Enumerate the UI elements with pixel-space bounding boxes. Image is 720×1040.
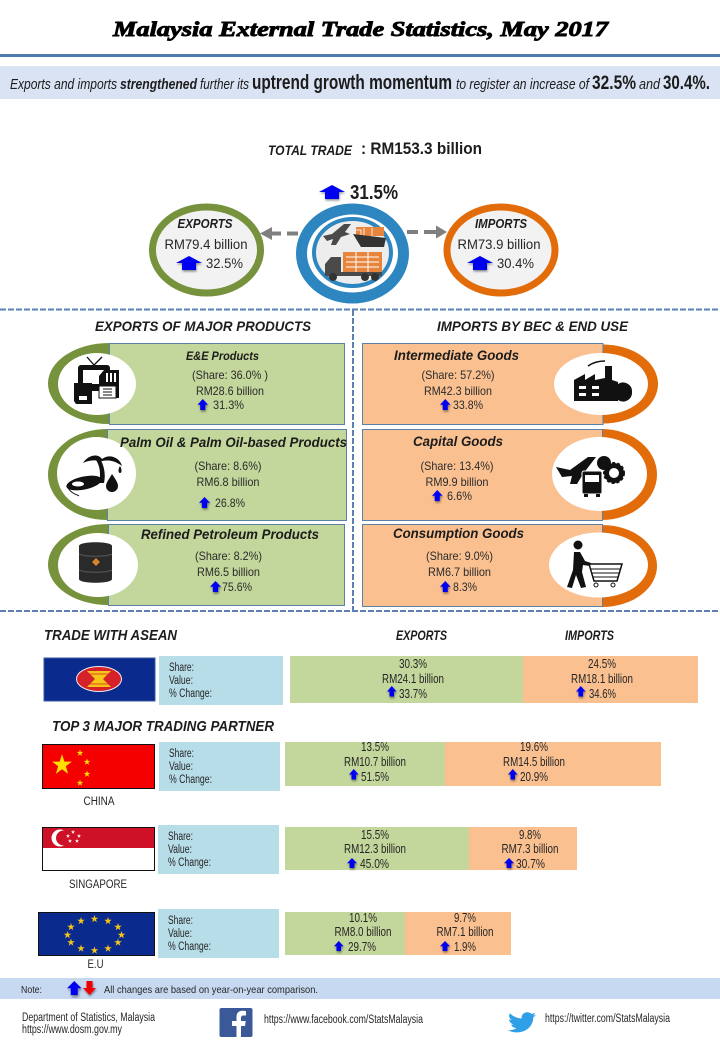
card: palm oil — [48, 429, 347, 520]
icon: plane, bus and gear — [556, 456, 624, 497]
label: EU: E.U — [88, 959, 104, 971]
flag: ASEAN — [44, 658, 155, 701]
exports circle: 32.5% — [206, 255, 243, 271]
row labels: Share: — [169, 662, 194, 674]
icon: palm and oil — [65, 456, 122, 496]
dashed section dividers — [0, 310, 720, 611]
headline band: to register an increase of — [456, 76, 590, 93]
exports circle: EXPORTS — [178, 216, 233, 231]
card: consumption goods — [362, 524, 657, 607]
imports bar: RM7.3 billion — [502, 842, 559, 856]
exports bar: 29.7% — [348, 940, 376, 954]
row labels: % Change: — [168, 941, 211, 953]
row labels — [158, 825, 279, 874]
twitter link: https://twitter.com/StatsMalaysia — [545, 1013, 670, 1025]
exports bar — [285, 740, 445, 786]
row labels — [158, 909, 279, 958]
imports bar — [405, 911, 511, 955]
card: intermediate goods: RM42.3 billion — [424, 384, 492, 398]
card: refined petroleum: RM6.5 billion — [197, 565, 260, 579]
column heading: exports: EXPORTS — [396, 628, 447, 643]
row labels: % Change: — [169, 688, 212, 700]
card: capital goods: Capital Goods — [413, 433, 503, 449]
icon: twitter — [508, 1012, 536, 1032]
row labels — [159, 742, 280, 791]
headline band — [0, 66, 720, 99]
imports bar — [523, 656, 698, 703]
imports circle: IMPORTS — [475, 216, 527, 231]
icon: factory — [574, 361, 632, 402]
card: E&amp;E products: (Share: 36.0% ) — [192, 368, 268, 382]
card: consumption goods: RM6.7 billion — [428, 565, 491, 579]
exports circle — [152, 207, 260, 293]
card: capital goods: 6.6% — [447, 489, 472, 503]
row labels: Value: — [168, 928, 192, 940]
flag: Singapore — [42, 828, 154, 870]
icon: cargo ship — [353, 227, 386, 247]
imports circle: RM73.9 billion — [458, 236, 540, 252]
total trade: TOTAL TRADE — [268, 142, 353, 158]
row: EU — [38, 909, 511, 971]
heading: exports: EXPORTS OF MAJOR PRODUCTS — [95, 318, 312, 334]
exports bar: 51.5% — [361, 770, 389, 784]
heading: top 3 trading partners: TOP 3 MAJOR TRADING PARTNER — [52, 718, 274, 735]
exports bar: 30.3% — [399, 657, 427, 671]
header rule — [0, 54, 720, 57]
exports bar: 13.5% — [361, 740, 389, 754]
row labels: Value: — [168, 844, 192, 856]
arrow to exports — [260, 227, 298, 240]
row labels: % Change: — [169, 774, 212, 786]
card: palm oil: (Share: 8.6%) — [194, 459, 262, 473]
exports circle: RM79.4 billion — [164, 236, 248, 252]
imports bar: RM7.1 billion — [436, 925, 494, 939]
card: consumption goods: 8.3% — [453, 580, 477, 594]
exports bar: 33.7% — [399, 687, 427, 701]
note band — [0, 978, 720, 999]
row: China — [42, 740, 661, 808]
imports bar — [445, 740, 661, 786]
note band: Note: — [21, 984, 42, 996]
label: Singapore: SINGAPORE — [69, 879, 127, 891]
flag: China — [42, 744, 154, 788]
card: E&amp;E products: E&E Products — [186, 349, 259, 363]
card: consumption goods: Consumption Goods — [393, 525, 524, 541]
icon: oil barrel — [79, 542, 112, 583]
card: palm oil: 26.8% — [215, 496, 245, 510]
title: Malaysia External Trade Statistics, May 2017 — [112, 17, 610, 41]
arrow to imports — [407, 226, 447, 238]
panel: exports of major products — [48, 318, 347, 606]
headline band: strengthened — [120, 76, 198, 93]
icon: plane — [323, 224, 351, 245]
card: palm oil: RM6.8 billion — [196, 475, 260, 489]
card: intermediate goods: 33.8% — [453, 398, 483, 412]
headline band: further its — [200, 76, 249, 93]
row labels: Value: — [169, 675, 193, 687]
footer: department: https://www.dosm.gov.my — [22, 1024, 122, 1036]
card: capital goods: RM9.9 billion — [426, 475, 488, 489]
imports bar: 19.6% — [520, 740, 548, 754]
footer: department — [22, 1012, 155, 1036]
total trade: : RM153.3 billion — [361, 139, 482, 158]
footer: department: Department of Statistics, Malaysia — [22, 1012, 155, 1024]
imports bar: 9.7% — [454, 911, 476, 925]
imports bar — [469, 827, 577, 871]
card: refined petroleum: Refined Petroleum Products — [141, 526, 319, 542]
exports bar: RM10.7 billion — [344, 755, 406, 769]
exports bar: RM24.1 billion — [382, 672, 444, 686]
label: China: CHINA — [84, 796, 115, 808]
exports bar: 15.5% — [361, 828, 389, 842]
imports bar: 1.9% — [454, 940, 476, 954]
exports bar — [285, 827, 469, 871]
card: intermediate goods: Intermediate Goods — [394, 347, 519, 363]
row labels: Share: — [168, 915, 193, 927]
card: intermediate goods: (Share: 57.2%) — [422, 368, 494, 382]
exports bar — [285, 911, 405, 955]
imports bar: RM14.5 billion — [503, 755, 565, 769]
imports bar: 9.8% — [519, 828, 541, 842]
centre trade circle — [302, 209, 404, 298]
heading: trade with ASEAN: TRADE WITH ASEAN — [44, 627, 178, 644]
note band: All changes are based on year-on-year comparison. — [104, 984, 318, 996]
exports bar: 45.0% — [360, 857, 389, 871]
heading: imports: IMPORTS BY BEC & END USE — [437, 318, 629, 334]
headline band: 32.5% — [592, 73, 636, 94]
exports bar: RM8.0 billion — [334, 925, 392, 939]
imports bar: RM18.1 billion — [571, 672, 633, 686]
card: capital goods — [362, 429, 657, 520]
row: ASEAN — [44, 656, 698, 705]
card: refined petroleum: (Share: 8.2%) — [195, 549, 262, 563]
row labels — [159, 656, 283, 705]
total trade — [268, 139, 482, 158]
card: capital goods: (Share: 13.4%) — [420, 459, 494, 473]
card: consumption goods: (Share: 9.0%) — [426, 549, 493, 563]
icon: facebook — [220, 1008, 252, 1037]
imports circle — [447, 207, 555, 293]
card: intermediate goods — [362, 344, 658, 424]
flag: EU — [38, 912, 154, 956]
card: E&amp;E products: 31.3% — [213, 398, 244, 412]
panel: imports by BEC and end use — [362, 318, 658, 607]
row labels: Share: — [168, 831, 193, 843]
card: E&amp;E products — [48, 343, 344, 424]
headline band: and — [639, 76, 661, 93]
imports bar: 24.5% — [588, 657, 616, 671]
icon: truck — [325, 252, 382, 281]
icon: electronics — [74, 357, 119, 404]
imports circle: 30.4% — [497, 255, 534, 271]
row: Singapore — [42, 825, 577, 891]
exports bar: RM12.3 billion — [344, 842, 406, 856]
imports bar: 34.6% — [589, 687, 616, 701]
headline band: Exports and imports — [10, 76, 117, 93]
row labels: Share: — [169, 748, 194, 760]
headline band: uptrend growth momentum — [252, 72, 452, 94]
row labels: % Change: — [168, 857, 211, 869]
imports bar: 20.9% — [520, 770, 548, 784]
row labels: Value: — [169, 761, 193, 773]
icon: person with cart — [567, 540, 622, 588]
total trade change: 31.5% — [350, 182, 398, 204]
card: refined petroleum — [48, 524, 344, 606]
facebook link: https://www.facebook.com/StatsMalaysia — [264, 1014, 423, 1026]
exports bar — [290, 656, 523, 703]
card: palm oil: Palm Oil & Palm Oil-based Products — [120, 434, 347, 450]
card: E&amp;E products: RM28.6 billion — [196, 384, 264, 398]
card: refined petroleum: 75.6% — [222, 580, 252, 594]
exports bar: 10.1% — [349, 911, 377, 925]
imports bar: 30.7% — [516, 857, 545, 871]
total trade change — [319, 182, 398, 204]
column heading: imports: IMPORTS — [565, 628, 614, 643]
